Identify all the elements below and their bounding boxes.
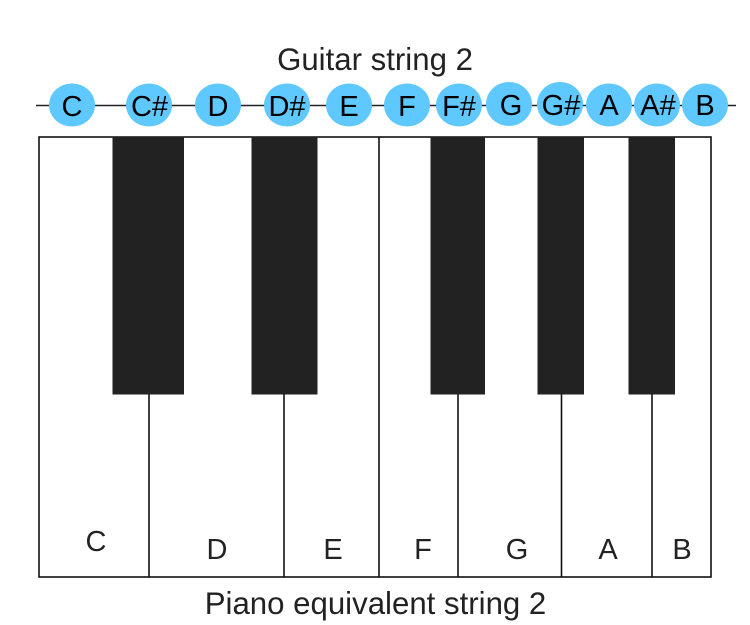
- black key C#: [113, 137, 184, 394]
- note E: E: [339, 91, 359, 123]
- note D#: D#: [268, 91, 306, 123]
- white key label A: A: [598, 534, 618, 566]
- note F: [384, 84, 430, 126]
- note G#: [537, 82, 583, 126]
- note F: F: [398, 91, 416, 123]
- black key A#: [629, 137, 674, 394]
- white key label B: B: [672, 534, 692, 566]
- note B: [682, 84, 728, 126]
- note F#: [436, 84, 482, 126]
- note F#: F#: [442, 91, 476, 123]
- note A: [586, 84, 632, 126]
- guitar string with note markers: [36, 82, 736, 126]
- piano keyboard: [39, 137, 711, 577]
- note A#: [634, 84, 680, 126]
- white key label G: G: [506, 534, 528, 566]
- title: guitar string 2: Guitar string 2: [277, 42, 473, 77]
- note B: B: [695, 90, 715, 122]
- white key label F: F: [414, 534, 432, 566]
- black key D#: [252, 137, 317, 394]
- note E: [326, 84, 372, 126]
- caption: piano equivalent string 2: Piano equivalent string 2: [205, 586, 546, 621]
- note A#: A#: [640, 90, 676, 122]
- white key label E: E: [323, 534, 343, 566]
- black key G#: [538, 137, 584, 394]
- note C#: [126, 84, 172, 126]
- white key label D: D: [207, 534, 227, 566]
- note D: D: [208, 91, 228, 123]
- note D: [195, 84, 241, 126]
- note G#: G#: [542, 90, 580, 122]
- note D#: [264, 84, 310, 126]
- note C: C: [62, 91, 82, 123]
- black key F#: [431, 137, 484, 394]
- note G: G: [500, 90, 522, 122]
- white key label C: C: [86, 526, 106, 558]
- note A: A: [599, 90, 619, 122]
- note G: [486, 82, 532, 126]
- note C: [49, 84, 95, 126]
- note C#: C#: [131, 91, 168, 123]
